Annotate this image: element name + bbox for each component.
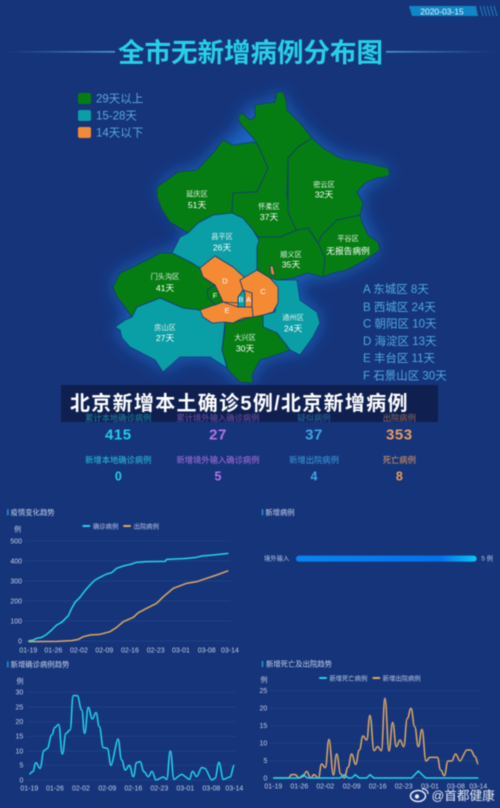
district: Huairou xyxy=(232,92,312,237)
chart: new confirmed trend: 例 xyxy=(16,676,23,685)
map legend: 29天以上 xyxy=(96,92,143,106)
district list: A 东城区 8天 xyxy=(363,283,429,296)
district list: E 丰台区 11天 xyxy=(363,351,435,365)
chart: epidemic trend: 03-14 xyxy=(221,648,239,655)
map labels: 顺义区 xyxy=(280,250,302,259)
chart: new confirmed trend: 10 xyxy=(16,748,23,755)
map labels: 密云区 xyxy=(313,180,335,189)
map legend xyxy=(78,92,143,140)
stats: new cases row: 新增境外输入确诊病例 xyxy=(177,455,259,465)
chart: epidemic trend: 500 xyxy=(10,538,22,545)
chart: new confirmed trend: 02-02 xyxy=(72,786,90,793)
district: Changping xyxy=(172,213,259,278)
chart: new confirmed trend: 新增确诊病例趋势 xyxy=(11,660,70,669)
map labels: 41天 xyxy=(156,283,174,293)
district: Xicheng xyxy=(238,290,245,307)
stats: cumulative row: 累计本地确诊病例 xyxy=(85,413,151,423)
chart: new deaths and discharges: 20 xyxy=(260,706,267,713)
chart: new confirmed trend: 01-26 xyxy=(46,786,64,793)
chart: epidemic trend: 300 xyxy=(10,579,22,586)
date badge xyxy=(409,6,497,16)
district: Shijingshan xyxy=(207,285,223,305)
map labels: 怀柔区 xyxy=(258,202,280,211)
map labels: A xyxy=(246,295,251,304)
chart: epidemic trend: 疫情变化趋势 xyxy=(11,508,55,517)
stats: new cases row xyxy=(85,455,416,484)
map labels: 51天 xyxy=(188,200,206,210)
map labels xyxy=(151,180,370,354)
chart: epidemic trend: 出院病例 xyxy=(134,521,159,530)
chart: epidemic trend: 例 xyxy=(14,524,21,533)
chart: epidemic trend: 03-01 xyxy=(172,648,190,655)
chart: epidemic trend: 02-16 xyxy=(121,648,139,655)
map labels: 24天 xyxy=(284,324,302,334)
central underlay xyxy=(225,266,262,320)
district: Dongcheng xyxy=(243,290,252,307)
chart: new confirmed trend xyxy=(7,660,243,793)
stats: new cases row: 死亡病例 xyxy=(383,455,416,465)
map labels: B xyxy=(238,295,244,304)
district: Fengtai xyxy=(200,302,253,323)
chart: new deaths and discharges: 15 xyxy=(260,723,267,730)
district list: F 石景山区 30天 xyxy=(363,370,447,382)
chart: new deaths and discharges: 5 xyxy=(263,758,267,765)
stats: new cases row: 4 xyxy=(311,470,318,484)
stats: new cases row: 8 xyxy=(396,470,403,484)
chart: new confirmed trend: 03-08 xyxy=(202,786,220,793)
chart: epidemic trend: 02-23 xyxy=(147,648,165,655)
district list: C 朝阳区 10天 xyxy=(363,318,437,330)
chart: epidemic trend: 100 xyxy=(10,619,22,626)
map labels: 延庆区 xyxy=(186,190,208,199)
map labels: D xyxy=(222,276,228,286)
map labels: 32天 xyxy=(315,190,333,200)
stats: new cases row: 新增本地确诊病例 xyxy=(85,455,151,465)
map labels: 27天 xyxy=(156,333,174,343)
district: Miyun xyxy=(288,138,390,243)
chart: new deaths and discharges: 02-02 xyxy=(316,784,334,791)
chart: new confirmed trend: 30 xyxy=(16,690,23,697)
map labels: 无报告病例 xyxy=(326,245,370,256)
chart: new confirmed trend: 25 xyxy=(16,704,23,711)
watermark xyxy=(410,788,495,803)
map labels: 通州区 xyxy=(282,313,304,322)
district: Yanqing xyxy=(157,140,268,233)
title: 全市无新增病例分布图 xyxy=(118,38,383,68)
chart: epidemic trend: 200 xyxy=(10,599,22,606)
chart: new confirmed trend: 5 xyxy=(19,763,23,770)
map legend: 14天以下 xyxy=(96,126,143,140)
map labels: 大兴区 xyxy=(234,333,256,342)
chart: new confirmed trend: 02-23 xyxy=(150,786,168,793)
headline banner: 北京新增本土确诊5例/北京新增病例 xyxy=(70,391,409,415)
map labels: 房山区 xyxy=(154,323,176,332)
map labels: E xyxy=(224,306,230,315)
chart: epidemic trend: 确诊病例 xyxy=(93,521,118,530)
chart: new cases by source: 5 例 xyxy=(481,553,493,562)
map labels: 昌平区 xyxy=(211,232,233,241)
map labels: 26天 xyxy=(213,242,231,252)
chart: new deaths and discharges: 03-14 xyxy=(469,784,487,791)
chart: new confirmed trend: 03-14 xyxy=(225,786,243,793)
map labels: 37天 xyxy=(260,212,278,222)
chart: epidemic trend: 03-08 xyxy=(198,648,216,655)
map labels: 30天 xyxy=(236,344,254,354)
chart: new deaths and discharges: 新增出院病例 xyxy=(383,673,421,682)
district: Chaoyang xyxy=(240,270,278,317)
stats: cumulative row xyxy=(85,413,416,444)
chart: new cases by source: 境外输入 xyxy=(264,553,290,562)
chart: new deaths and discharges: 新增死亡及出院趋势 xyxy=(266,660,333,669)
map labels: 门头沟区 xyxy=(151,272,179,281)
chart: new deaths and discharges: 01-19 xyxy=(264,784,282,791)
date badge: 2020-03-15 xyxy=(420,6,464,16)
stats: cumulative row: 出院病例 xyxy=(383,413,416,423)
chart: new confirmed trend: 02-09 xyxy=(98,786,116,793)
stats: new cases row: 新增出院病例 xyxy=(289,455,339,465)
chart: new deaths and discharges: 10 xyxy=(260,741,267,748)
district: Tongzhou xyxy=(263,278,320,355)
watermark: @首都健康 xyxy=(432,788,495,803)
chart: new deaths and discharges: 02-23 xyxy=(395,784,413,791)
district: Fangshan xyxy=(115,298,227,372)
chart: new confirmed trend: 20 xyxy=(16,719,23,726)
chart: epidemic trend: 0 xyxy=(18,639,22,646)
chart: epidemic trend xyxy=(7,508,239,655)
chart: new deaths and discharges: 25 xyxy=(260,688,267,695)
district: Daxing xyxy=(222,315,290,383)
chart: new deaths and discharges xyxy=(260,660,487,791)
headline banner xyxy=(61,385,438,422)
chart: new confirmed trend: 03-01 xyxy=(176,786,194,793)
map labels: 平谷区 xyxy=(337,234,359,243)
district list: B 西城区 24天 xyxy=(363,301,436,314)
stats: cumulative row: 353 xyxy=(386,426,413,444)
stats: new cases row: 5 xyxy=(215,470,222,484)
chart: new deaths and discharges: 03-08 xyxy=(447,784,465,791)
chart: new cases by source: 新增病例 xyxy=(265,508,295,517)
stats: cumulative row: 疑似病例 xyxy=(297,413,331,423)
chart: new confirmed trend: 02-16 xyxy=(124,786,142,793)
chart: new confirmed trend: 0 xyxy=(19,777,23,784)
chart: new deaths and discharges: 02-16 xyxy=(369,784,387,791)
stats: cumulative row: 37 xyxy=(305,426,323,444)
chart: epidemic trend: 02-09 xyxy=(95,648,113,655)
chart: epidemic trend: 01-26 xyxy=(44,648,62,655)
stats: cumulative row: 27 xyxy=(209,426,227,444)
district: Mentougou xyxy=(113,253,223,317)
map labels: C xyxy=(260,287,266,296)
district list xyxy=(363,283,447,382)
map of Beijing districts xyxy=(113,92,390,383)
chart: new deaths and discharges: 03-01 xyxy=(421,784,439,791)
chart: new cases by source xyxy=(262,508,493,562)
chart: new deaths and discharges: 02-09 xyxy=(343,784,361,791)
sliver of Chaoyang xyxy=(270,266,275,276)
chart: new deaths and discharges: 新增死亡病例 xyxy=(329,673,367,682)
chart: epidemic trend: 01-19 xyxy=(19,648,37,655)
chart: new deaths and discharges: 例 xyxy=(260,675,267,684)
chart: new confirmed trend: 15 xyxy=(16,734,23,741)
stats: cumulative row: 415 xyxy=(105,426,132,444)
stats: cumulative row: 累计境外输入确诊病例 xyxy=(177,413,259,423)
map labels: 35天 xyxy=(282,260,300,270)
map legend: 15-28天 xyxy=(96,110,137,122)
chart: new deaths and discharges: 01-26 xyxy=(290,784,308,791)
district: Haidian xyxy=(200,256,245,303)
chart: epidemic trend: 02-02 xyxy=(70,648,88,655)
chart: new deaths and discharges: 0 xyxy=(263,775,267,782)
stats: new cases row: 0 xyxy=(115,470,122,484)
chart: epidemic trend: 400 xyxy=(10,559,22,566)
district: Shunyi xyxy=(257,228,325,280)
district: Pinggu xyxy=(318,215,380,277)
district list: D 海淀区 13天 xyxy=(363,334,437,348)
map labels: F xyxy=(213,291,218,300)
chart: new confirmed trend: 01-19 xyxy=(20,786,38,793)
